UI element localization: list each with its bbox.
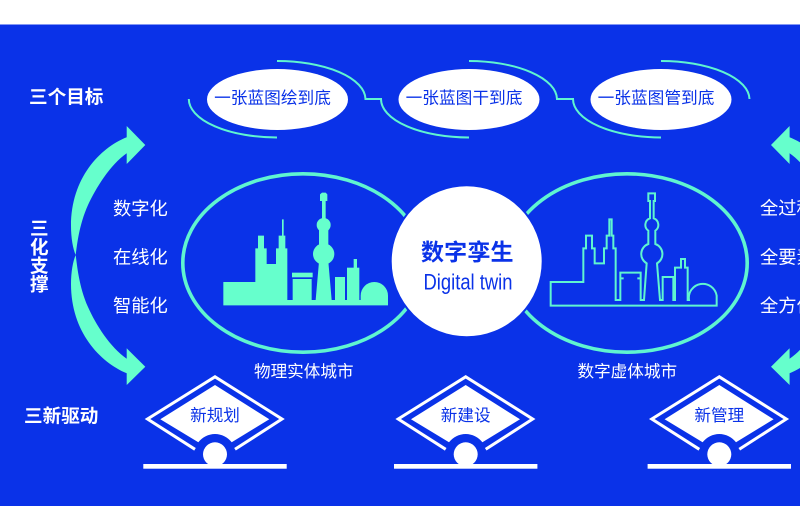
icon: solid skyline: [223, 193, 388, 305]
centre circle: digital twin: 数字孪生: [421, 239, 514, 265]
heading: three modernisations (vertical): 撑: [30, 274, 49, 295]
driver icon: new planning: 新规划: [190, 406, 240, 425]
centre circle: digital twin: [391, 185, 543, 337]
goal oval 2: [398, 69, 540, 130]
icon: outline skyline: [551, 193, 717, 306]
driver icon: new construction: [394, 377, 537, 469]
heading: three modernisations (vertical): [30, 218, 49, 295]
left list: 数字化: [113, 198, 168, 219]
left double arrow: [71, 126, 145, 385]
heading: three new drivers: 三新驱动: [24, 406, 98, 426]
caption: digital city: 数字虚体城市: [578, 362, 677, 381]
left list: 在线化: [113, 246, 168, 268]
heading: three modernisations (vertical): 支: [30, 256, 49, 276]
driver icon: new construction: 新建设: [441, 406, 491, 425]
driver icon: new planning: [143, 377, 287, 469]
goal oval 2: 一张蓝图干到底: [406, 88, 522, 108]
heading: three goals: 三个目标: [29, 86, 104, 108]
heading: three modernisations (vertical): 三: [30, 218, 49, 239]
left list: 智能化: [113, 295, 168, 316]
caption: physical city: 物理实体城市: [254, 362, 354, 381]
connector arcs around goal ovals: [189, 61, 750, 137]
centre circle: digital twin: Digital twin: [424, 269, 512, 294]
digital city oval: [507, 174, 747, 352]
left list: [113, 198, 168, 316]
goal oval 1: 一张蓝图绘到底: [214, 88, 331, 108]
goal oval 1: [207, 69, 348, 130]
physical city oval: [183, 174, 423, 352]
heading: three modernisations (vertical): 化: [30, 237, 49, 258]
right list: [760, 198, 800, 316]
goal oval 3: 一张蓝图管到底: [598, 88, 714, 108]
driver icon: new management: [648, 377, 791, 469]
right double arrow: [771, 126, 800, 385]
driver icon: new management: 新管理: [694, 406, 745, 425]
goal oval 3: [590, 69, 732, 130]
